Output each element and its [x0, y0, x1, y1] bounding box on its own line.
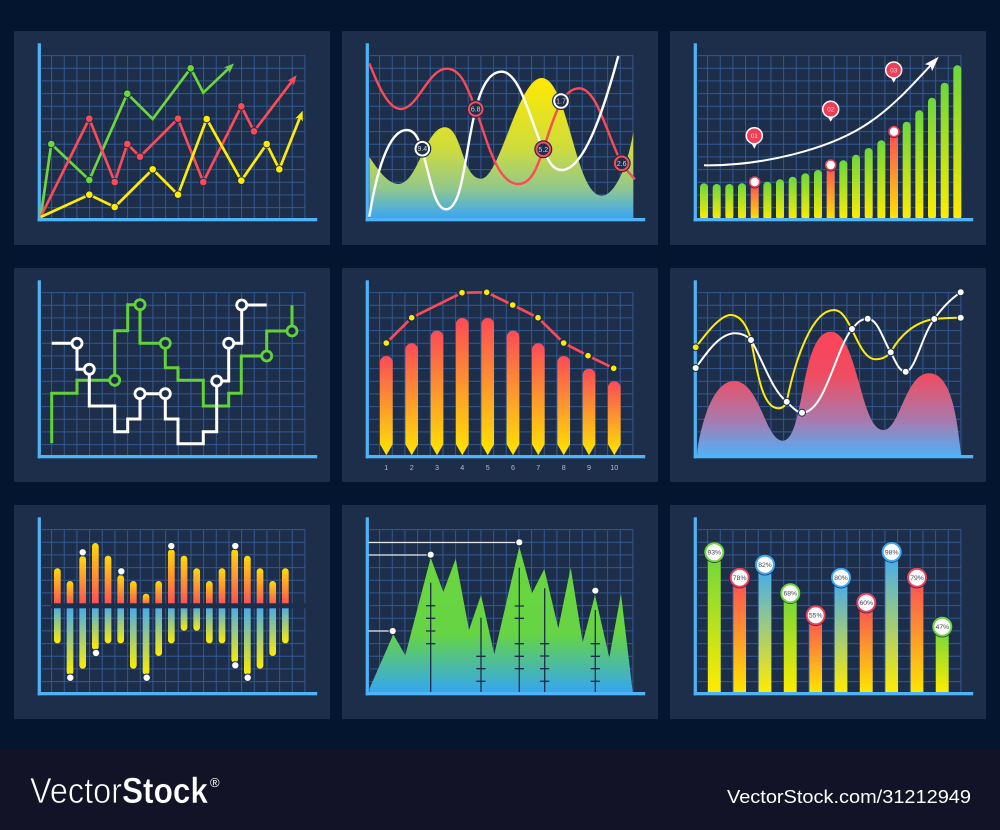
- x axis labels: 8: [562, 463, 566, 472]
- x axis labels: 5: [486, 463, 490, 472]
- yellow curve: [692, 310, 961, 408]
- percentage badges: 79%: [910, 575, 924, 582]
- percentage badges: 47%: [935, 624, 949, 631]
- percentage badges: 68%: [783, 591, 797, 598]
- dark tick stems: [426, 568, 600, 692]
- pin 01: 01: [751, 133, 758, 140]
- red arrow line: [41, 81, 293, 217]
- percentage badges: [704, 541, 953, 637]
- pin 03: 03: [890, 67, 898, 74]
- percentage badges: 98%: [885, 549, 899, 556]
- green to yellow bars: [700, 65, 961, 221]
- badge 2.6: [613, 154, 631, 172]
- green mountain area: [369, 547, 633, 692]
- panel: area chart with curves and value badges: [342, 31, 658, 245]
- VectorStock logo: Vector: [30, 770, 122, 811]
- badge 6.8: 6.8: [471, 106, 481, 114]
- panel: percentage bar chart: [670, 505, 986, 719]
- red curve: [369, 63, 635, 184]
- highlight markers: [748, 125, 900, 188]
- percentage badges: 82%: [758, 562, 772, 569]
- percentage badges: 80%: [834, 575, 848, 582]
- VectorStock logo: Stock: [122, 770, 209, 811]
- red line with yellow dots: [382, 288, 618, 372]
- white trend arrow: [704, 66, 930, 165]
- badge 9.4: [413, 140, 431, 158]
- VectorStock logo: [30, 770, 220, 811]
- badge 5.2: 5.2: [538, 147, 548, 154]
- white data dots: [692, 289, 964, 416]
- panel: red area with two curves: [670, 268, 986, 482]
- pin 02: 02: [827, 107, 835, 114]
- panel: diverging bar chart: [14, 505, 330, 719]
- x axis labels: 3: [435, 463, 439, 472]
- badge 6.8: [467, 100, 485, 118]
- pin 02: [823, 101, 839, 122]
- badge 1.7: 1.7: [556, 98, 566, 106]
- white curve: [369, 56, 618, 217]
- VectorStock logo: ®: [210, 775, 220, 790]
- yellow arrow line: [41, 115, 300, 217]
- x axis labels: 1: [384, 463, 388, 472]
- orange highlighted bars: [751, 132, 898, 220]
- panel: multi-line arrows chart: [14, 31, 330, 245]
- badge 5.2: [534, 140, 552, 158]
- white step line: [52, 300, 267, 444]
- panel: pencil bar chart with line: [342, 268, 658, 482]
- percentage badges: 93%: [707, 550, 721, 557]
- badge 2.6: 2.6: [617, 161, 627, 168]
- x axis labels: [384, 463, 618, 472]
- badge 9.4: 9.4: [417, 146, 427, 153]
- x axis labels: 2: [410, 463, 414, 472]
- white end dots: [67, 542, 251, 681]
- x axis labels: 9: [587, 463, 591, 472]
- green step line: [52, 300, 297, 443]
- pin 03: [886, 62, 902, 83]
- percentage badges: 60%: [859, 600, 873, 607]
- percentage badges: 78%: [733, 575, 747, 582]
- x axis labels: 10: [610, 463, 618, 472]
- x axis labels: 4: [460, 463, 464, 472]
- panel: step line chart: [14, 268, 330, 482]
- downward blue bars: [54, 605, 289, 675]
- panel: rising bars with trend arrow: [670, 31, 986, 245]
- badge 1.7: [552, 92, 570, 110]
- pin 01: [746, 128, 762, 149]
- white curve: [696, 292, 961, 413]
- x axis labels: 6: [511, 463, 515, 472]
- image id text: VectorStock.com/31212949: [727, 786, 971, 807]
- red to blue area: [697, 332, 961, 456]
- watermark band: [0, 750, 1000, 830]
- green arrow line: [41, 64, 229, 217]
- percentage badges: 55%: [809, 613, 823, 620]
- x axis labels: 7: [536, 463, 540, 472]
- white leader lines and dots: [368, 539, 599, 635]
- panel: mountain area chart: [342, 505, 658, 719]
- percentage bars: [708, 552, 949, 692]
- pencil bars: [380, 318, 621, 455]
- upward orange bars: [54, 543, 289, 607]
- yellow to blue area: [369, 78, 633, 218]
